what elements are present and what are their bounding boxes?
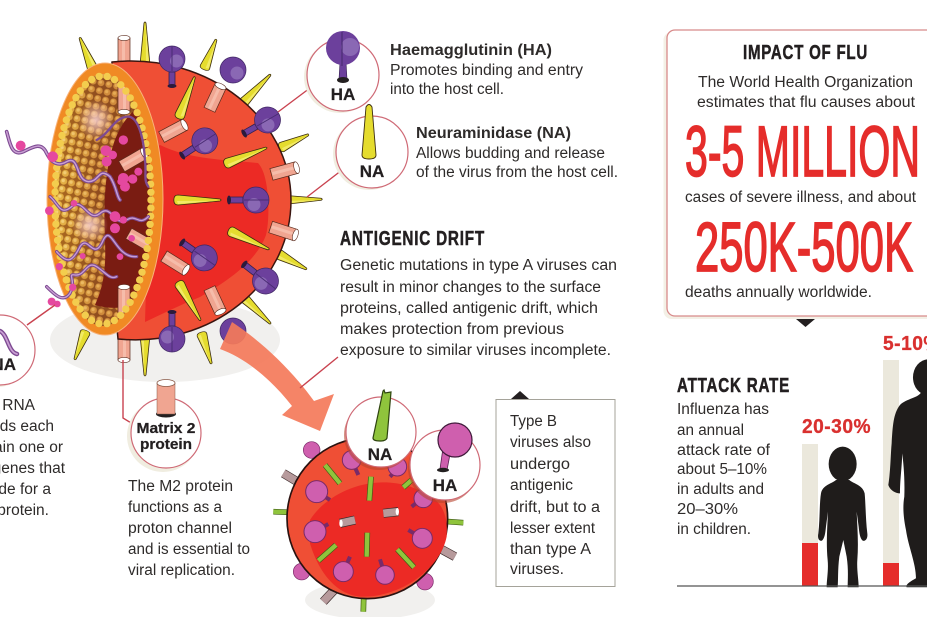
note text: than type A	[510, 541, 592, 558]
arrow to drifted virus	[220, 322, 334, 431]
note text: Type B	[510, 413, 557, 430]
panel: impact of flu	[664, 30, 927, 319]
pointer triangle	[796, 319, 815, 327]
deaths text: deaths annually worldwide.	[685, 284, 872, 301]
chart: children attack rate	[802, 416, 871, 587]
text: antigenic drift: exposure to similar viruses incomplete.	[340, 342, 611, 359]
interior with lipid beads	[54, 74, 152, 326]
text: Neuraminidase: of the virus from the host cell.	[416, 164, 618, 181]
drifted virus illustration	[273, 438, 463, 617]
text: Haemagglutinin: into the host cell.	[390, 81, 504, 98]
text: attack rate	[677, 401, 771, 538]
callout: drifted NA: NA	[368, 445, 392, 464]
text: M2 protein: viral replication.	[128, 562, 235, 579]
callout: RNA	[0, 315, 35, 387]
text: attack rate: an annual	[677, 422, 744, 439]
text: antigenic drift: proteins, called antigenic drift, which	[340, 300, 598, 317]
heading: attack rate: ATTACK RATE	[677, 375, 790, 397]
callout: drifted NA	[344, 390, 416, 470]
text: M2 protein: The M2 protein	[128, 478, 233, 495]
note text	[510, 413, 600, 578]
callout: drifted HA: HA	[433, 476, 457, 495]
child silhouette	[818, 447, 867, 587]
proteins behind	[273, 442, 463, 612]
note text: viruses also	[510, 434, 591, 451]
heading: IMPACT OF FLU	[743, 42, 868, 64]
text: antigenic drift	[340, 257, 617, 359]
value label: 20-30%	[802, 416, 871, 438]
adult silhouette	[888, 359, 927, 587]
callout: Matrix 2 protein	[127, 380, 201, 472]
text: Neuraminidase: Allows budding and release	[416, 145, 605, 162]
connector lines	[27, 88, 342, 426]
text: M2 protein: and is essential to	[128, 541, 250, 558]
ground shadow	[305, 581, 435, 617]
callout: HA: HA	[331, 85, 355, 104]
bar	[883, 360, 899, 586]
callout: NA: NA	[360, 162, 384, 181]
text: M2 protein: proton channel	[128, 520, 232, 537]
note text: antigenic	[510, 477, 573, 494]
text: attack rate: attack rate of	[677, 442, 771, 459]
text: Haemagglutinin: Haemagglutinin (HA)	[390, 42, 552, 59]
text: attack rate: Influenza has	[677, 401, 769, 418]
text: attack rate: about 5–10%	[677, 461, 767, 478]
text: M2 protein	[128, 478, 250, 579]
ground shadow	[50, 298, 280, 382]
rim of gold beads	[55, 76, 151, 324]
callout: HA	[304, 31, 379, 113]
text: RNA description	[0, 397, 66, 519]
text: antigenic drift: Genetic mutations in type A viruses can	[340, 257, 617, 274]
callout: NA	[333, 104, 408, 190]
severe illness text: cases of severe illness, and about	[685, 189, 917, 206]
panel: type B note	[496, 391, 615, 586]
outer spikes and proteins behind the shell	[70, 22, 322, 376]
text: attack rate: in children.	[677, 521, 751, 538]
text: attack rate: in adults and	[677, 481, 764, 498]
outer shell	[105, 61, 291, 340]
shell	[287, 438, 448, 599]
text: antigenic drift: makes protection from previous	[340, 321, 564, 338]
text: Haemagglutinin	[390, 42, 583, 98]
text: antigenic drift: result in minor changes to the surface	[340, 279, 601, 296]
pink HA proteins	[304, 451, 433, 584]
pointer	[511, 391, 529, 399]
heading: antigenic drift: ANTIGENIC DRIFT	[340, 228, 485, 250]
note text: lesser extent	[510, 520, 596, 537]
callout: drifted HA	[408, 423, 480, 503]
callout: Matrix 2 protein: Matrix 2	[136, 420, 196, 437]
RNA strands and pink beads	[7, 117, 148, 307]
chart baseline	[677, 585, 927, 587]
chart: adults attack rate	[883, 333, 927, 587]
surface proteins on shell	[159, 46, 301, 352]
cut face ring	[47, 63, 163, 335]
intro	[697, 74, 916, 111]
note text: drift, but to a	[510, 499, 600, 516]
intro: The World Health Organization	[698, 74, 913, 91]
lit core	[310, 482, 447, 597]
note text: viruses.	[510, 561, 564, 578]
green NA rods	[318, 465, 414, 567]
text: M2 protein: functions as a	[128, 499, 222, 516]
text: Haemagglutinin: Promotes binding and entry	[390, 62, 583, 79]
intro: estimates that flu causes about	[697, 94, 916, 111]
note text: undergo	[510, 456, 570, 473]
callout: Matrix 2 protein: protein	[140, 436, 192, 453]
text: Neuraminidase: Neuraminidase (NA)	[416, 125, 571, 142]
text: Neuraminidase	[416, 125, 618, 181]
lit core of shell	[145, 145, 268, 322]
main virus illustration	[7, 22, 322, 382]
text: attack rate: 20–30%	[677, 501, 738, 518]
bar	[802, 444, 818, 586]
